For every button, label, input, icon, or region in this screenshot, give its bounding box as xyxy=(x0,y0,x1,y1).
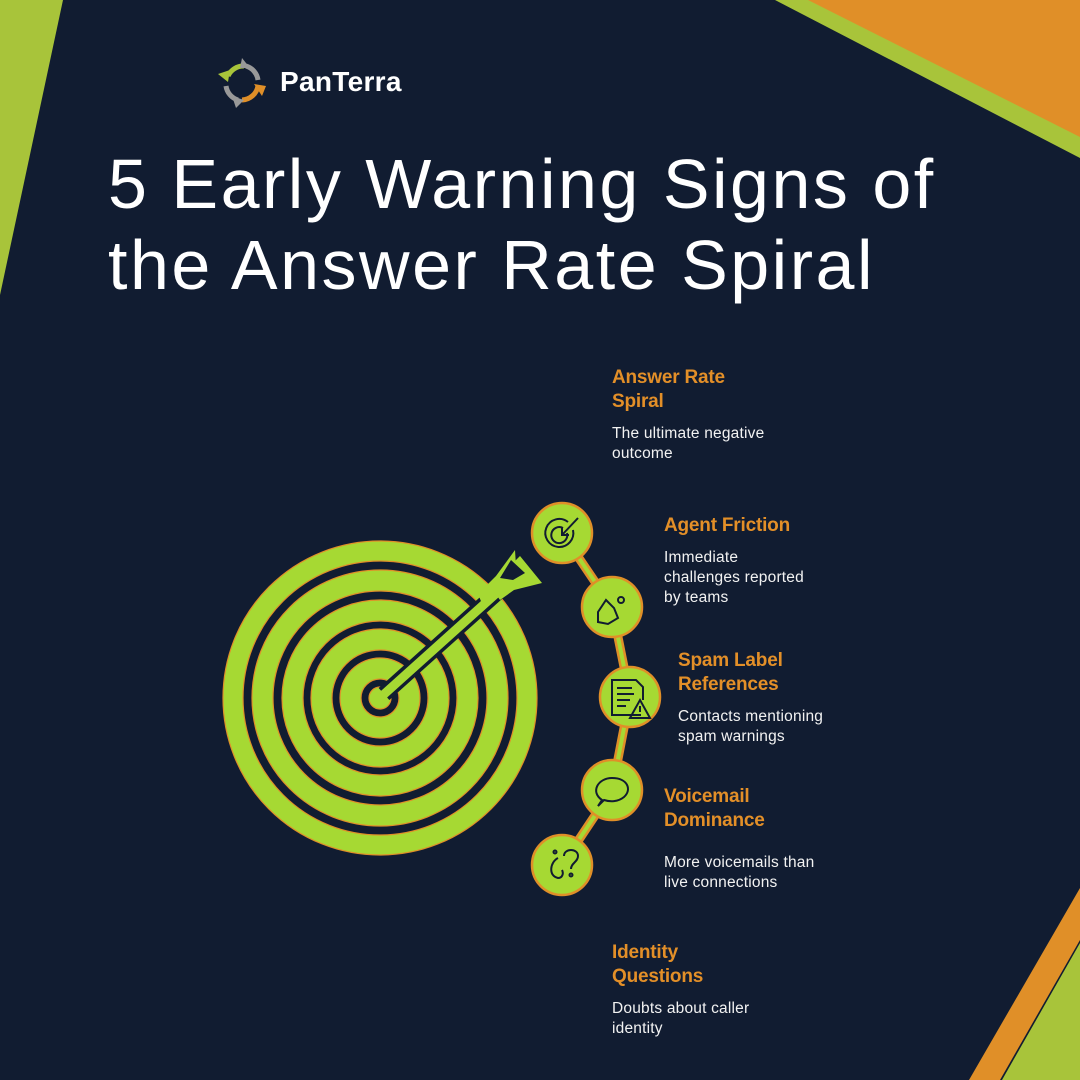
label: Voicemail Dominance: Dominance xyxy=(664,810,765,831)
label: Voicemail Dominance: Voicemail xyxy=(664,786,750,807)
title: 5 Early Warning Signs of xyxy=(108,145,936,223)
label: Answer Rate Spiral: outcome xyxy=(612,445,673,462)
label: Answer Rate Spiral: Answer Rate xyxy=(612,367,725,388)
label: Identity Questions: identity xyxy=(612,1020,663,1037)
label: Answer Rate Spiral: The ultimate negative xyxy=(612,425,764,442)
icon: speech bubble xyxy=(596,778,628,806)
label: Answer Rate Spiral xyxy=(612,367,764,462)
target with arrow xyxy=(222,540,542,856)
label: Identity Questions: Doubts about caller xyxy=(612,1000,749,1017)
label: Spam Label References xyxy=(678,650,823,745)
connector arc with icons xyxy=(530,502,662,896)
icon: question marks xyxy=(551,850,578,878)
icon: target arrow xyxy=(545,518,578,547)
label: Identity Questions xyxy=(612,942,749,1037)
label: Voicemail Dominance: live connections xyxy=(664,874,778,891)
title: the Answer Rate Spiral xyxy=(108,226,875,304)
label: Agent Friction: challenges reported xyxy=(664,569,804,586)
label: Agent Friction xyxy=(664,515,804,606)
logo: PanTerra xyxy=(280,66,402,97)
logo xyxy=(218,58,402,108)
label: Spam Label References: spam warnings xyxy=(678,728,785,745)
label: Spam Label References: Contacts mentioning xyxy=(678,708,823,725)
label: Voicemail Dominance xyxy=(664,786,814,891)
label: Identity Questions: Questions xyxy=(612,966,703,987)
title xyxy=(108,145,936,304)
icon: document warning xyxy=(612,680,650,718)
label: Agent Friction: by teams xyxy=(664,589,728,606)
label: Voicemail Dominance: More voicemails than xyxy=(664,854,814,871)
label: Identity Questions: Identity xyxy=(612,942,678,963)
icon: hand xyxy=(598,597,624,624)
label: Agent Friction: Agent Friction xyxy=(664,515,790,536)
label: Spam Label References: References xyxy=(678,674,778,695)
label: Spam Label References: Spam Label xyxy=(678,650,783,671)
label: Agent Friction: Immediate xyxy=(664,549,738,566)
label: Answer Rate Spiral: Spiral xyxy=(612,391,664,412)
